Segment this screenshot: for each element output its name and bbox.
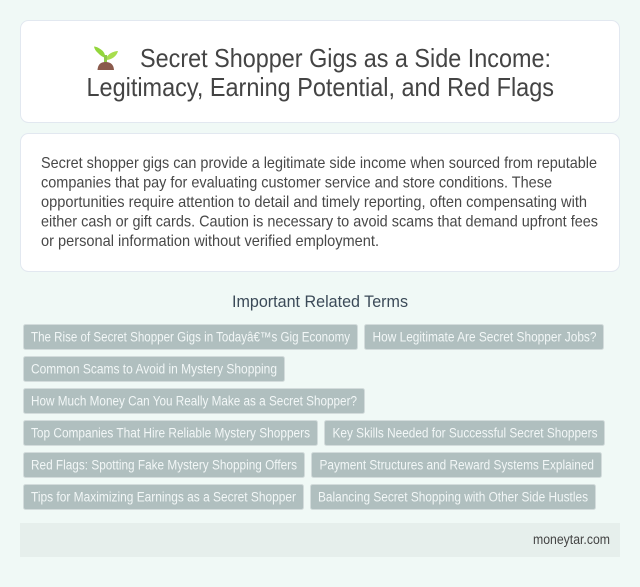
tag: The Rise of Secret Shopper Gigs in Todayâ€™s Gig Economy: [31, 330, 350, 344]
text block: description: or personal information without verified employment.: [41, 233, 379, 250]
tag: [24, 484, 304, 510]
tag: [324, 420, 604, 446]
tag: How Much Money Can You Really Make as a Secret Shopper?: [31, 394, 357, 408]
tag: [312, 452, 602, 478]
title: Legitimacy, Earning Potential, and Red Flags: [86, 72, 554, 102]
panel: description: [20, 134, 620, 272]
text block: description: Secret shopper gigs can provide a legitimate side income when sourced from reputable: [41, 155, 597, 172]
tag: Tips for Maximizing Earnings as a Secret Shopper: [31, 490, 296, 504]
tag: [310, 484, 596, 510]
tag: [364, 324, 604, 350]
tag: [24, 388, 364, 414]
tag: Red Flags: Spotting Fake Mystery Shopping Offers: [31, 458, 297, 472]
tag: Key Skills Needed for Successful Secret Shoppers: [332, 426, 598, 440]
tag: [24, 452, 304, 478]
text block: description: [41, 155, 598, 250]
tag: Payment Structures and Reward Systems Explained: [320, 458, 594, 472]
panel: header: [20, 20, 620, 122]
tag: [24, 324, 358, 350]
text block: description: companies that pay for evaluating customer service and store conditions. These: [41, 174, 552, 192]
icon: seedling: [94, 46, 118, 70]
tag: [24, 420, 318, 446]
title: Secret Shopper Gigs as a Side Income:: [140, 43, 551, 73]
tag: Balancing Secret Shopping with Other Side Hustles: [318, 490, 588, 504]
panel: term tags: [24, 324, 604, 510]
footer: [20, 523, 620, 557]
footer source: moneytar.com: [533, 532, 610, 547]
tag: Common Scams to Avoid in Mystery Shopping: [31, 362, 277, 376]
tag: How Legitimate Are Secret Shopper Jobs?: [372, 330, 596, 344]
tag: [24, 356, 284, 382]
text block: description: either cash or gift cards. Caution is necessary to avoid scams that demand upfront fees: [41, 214, 598, 230]
heading: important related terms: Important Related Terms: [232, 292, 408, 311]
text block: description: opportunities require attention to detail and timely reporting, often compensating with: [41, 194, 587, 211]
title: [86, 43, 554, 102]
tag: Top Companies That Hire Reliable Mystery Shoppers: [31, 426, 310, 440]
